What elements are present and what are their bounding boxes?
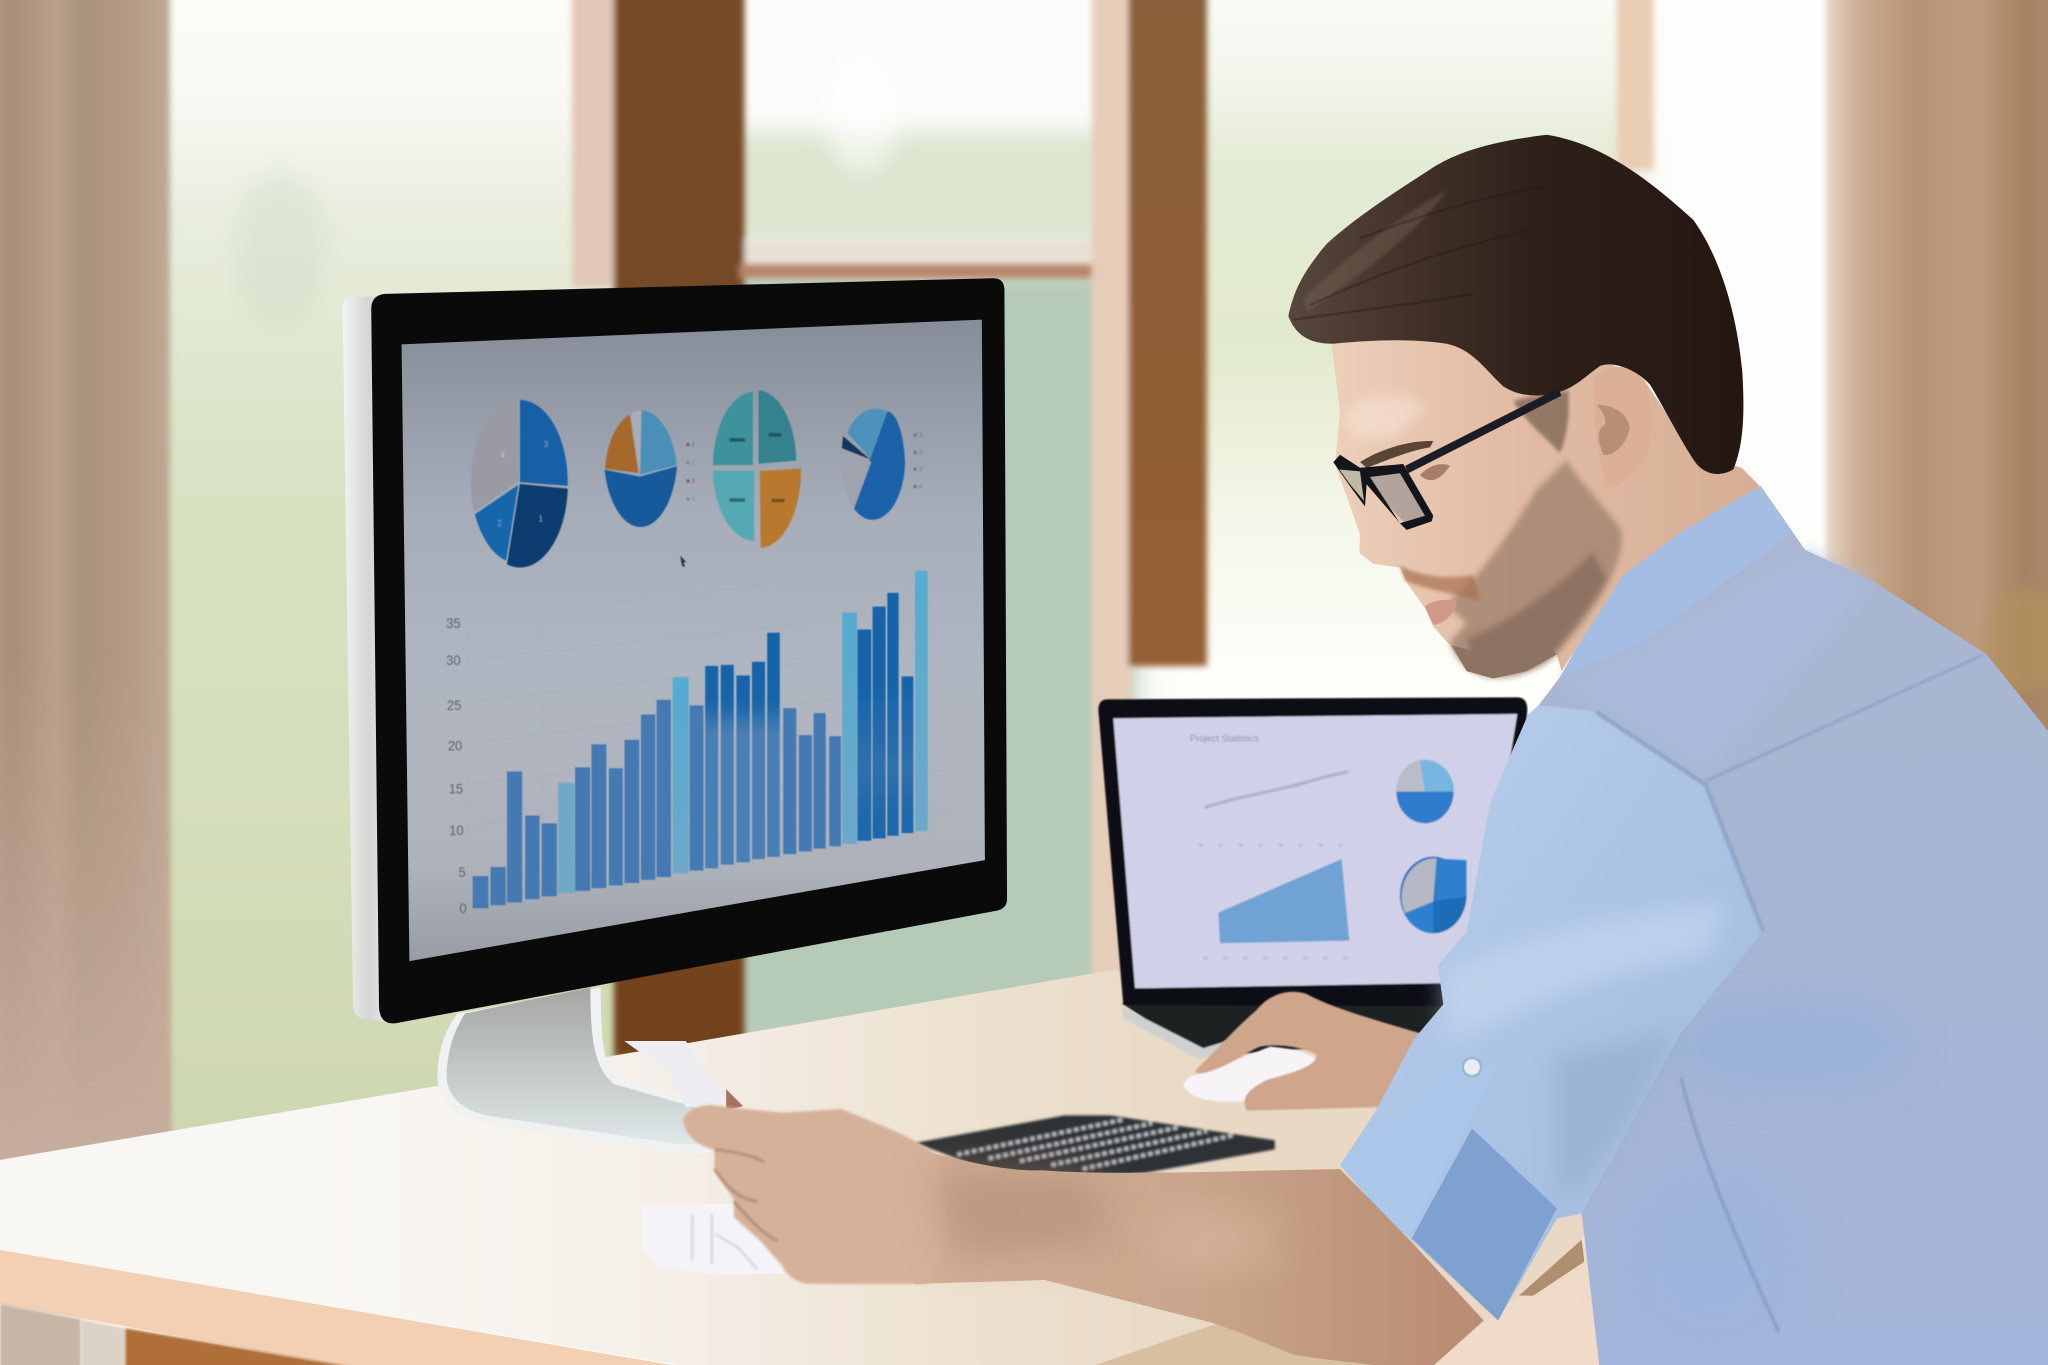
pie chart 2	[605, 411, 677, 527]
screen	[402, 320, 985, 961]
pie 4 legend: ■ 1	[913, 432, 923, 439]
pie 4 legend	[913, 432, 923, 491]
lower back blue area	[1620, 1162, 1802, 1345]
laptop base	[1122, 997, 1457, 1057]
pie chart 1: 4	[500, 450, 505, 459]
underarm blue fold	[1672, 1003, 1907, 1087]
arm hair shading	[930, 1166, 1110, 1260]
keyboard body	[916, 1115, 1275, 1182]
desk front edge	[0, 1250, 686, 1365]
laptop silver edge	[1122, 1007, 1230, 1058]
screen content	[446, 390, 947, 916]
hair highlight	[1303, 190, 1447, 312]
shirt body	[1539, 486, 2048, 1365]
paper chart marks	[692, 1215, 758, 1270]
paper held up	[624, 1041, 727, 1108]
sleeve button	[1463, 1058, 1481, 1076]
glasses temple	[1407, 392, 1560, 470]
pie 2 legend	[686, 441, 695, 503]
right curtain	[1826, 0, 2048, 758]
far right window pane	[1648, 0, 1838, 758]
armhole seam	[1596, 712, 1763, 931]
laptop line chart axis ticks	[1198, 840, 1350, 850]
darker jaw beard	[1467, 553, 1607, 673]
mouse	[1183, 1047, 1320, 1102]
laptop pie bottom	[1400, 857, 1467, 933]
pie 4 legend: ■ 2	[913, 449, 923, 457]
y axis labels: 35	[446, 616, 461, 631]
desktop monitor	[343, 278, 1007, 1023]
left curtain lower tint	[0, 653, 170, 1175]
paper on desk	[643, 1204, 785, 1275]
y axis labels: 5	[459, 865, 466, 880]
desk	[0, 970, 1607, 1365]
keyboard	[916, 1115, 1275, 1182]
ear	[1593, 367, 1651, 488]
glasses	[1333, 392, 1560, 530]
monitor stand	[438, 987, 719, 1155]
wooden window frames	[572, 0, 1654, 1058]
pie chart 4	[841, 409, 905, 520]
yoke seam	[1706, 654, 1984, 781]
cuff strap	[1340, 1061, 1495, 1238]
chart gridlines	[468, 564, 947, 908]
left pane foliage	[235, 170, 327, 327]
desk rear rail	[1519, 1239, 1584, 1296]
left window pane	[131, 0, 653, 1202]
bar chart	[473, 571, 928, 908]
under desk: table leg	[0, 1303, 81, 1365]
pie 4 legend: ■ 3	[913, 466, 923, 473]
laptop title: Project Statistics	[1190, 734, 1259, 744]
yoke	[1559, 550, 1873, 778]
sleeve shadow	[1554, 1032, 1678, 1208]
pie chart 1: 2	[497, 519, 502, 528]
key rows	[957, 1119, 1234, 1169]
right window pane	[1175, 0, 1646, 993]
y axis labels: 0	[459, 901, 467, 916]
man shirt	[1340, 486, 2048, 1365]
middle window pane	[705, 0, 1136, 1051]
lips	[1425, 600, 1457, 625]
laptop pie top	[1396, 760, 1454, 823]
window light glare	[825, 51, 899, 171]
pie 2 legend: ■ 2	[686, 460, 695, 467]
under desk: pale curtain	[81, 1319, 125, 1365]
pie 4 legend: ■ 4	[913, 483, 923, 491]
laptop area chart	[1218, 859, 1349, 943]
sleeve fold highlight	[1443, 901, 1724, 1045]
pie chart 3	[713, 390, 801, 548]
hand on mouse	[1195, 992, 1420, 1111]
glasses lens	[1360, 470, 1428, 525]
moustache	[1400, 566, 1480, 601]
glasses far lens	[1339, 470, 1364, 501]
body side seam	[1681, 1078, 1779, 1332]
desk side shadow	[1088, 1324, 1424, 1365]
back hand and mouse	[1183, 992, 1420, 1111]
pie 2 legend: ■ 3	[686, 478, 695, 485]
forearm	[914, 1149, 1484, 1365]
arm highlight	[1149, 1215, 1280, 1267]
desk top	[0, 970, 1587, 1365]
floor under desk right	[1306, 1234, 1607, 1365]
front arm and hand	[683, 1089, 1484, 1365]
eyebrow	[1360, 441, 1433, 468]
beard stubble	[1447, 460, 1622, 678]
pie 2 legend: ■ 4	[686, 496, 695, 503]
right curtain yellow patch	[1988, 588, 2048, 692]
pie 2 legend: ■ 1	[686, 441, 695, 448]
black bezel	[371, 278, 1007, 1023]
hand	[683, 1105, 947, 1284]
sleeve	[1340, 705, 1763, 1320]
pie chart 1: 3	[544, 440, 549, 449]
mouse cursor	[680, 556, 686, 567]
finger creases	[714, 1149, 777, 1241]
chin edge beard	[1452, 645, 1557, 679]
y axis labels: 10	[449, 822, 464, 838]
finger behind paper	[726, 1089, 743, 1110]
hair	[1288, 135, 1743, 474]
y axis labels: 20	[448, 738, 462, 753]
y axis labels: 15	[449, 781, 463, 797]
laptop area chart axis ticks	[1203, 953, 1360, 963]
laptop screen	[1113, 714, 1517, 988]
stand rim	[438, 987, 719, 1155]
y axis labels: 30	[446, 653, 461, 668]
pie chart 1	[471, 400, 568, 568]
neck and face skin	[1332, 327, 1760, 679]
pie chart 1: 1	[539, 514, 543, 524]
y axis labels	[446, 616, 467, 916]
silver monitor casing	[343, 296, 394, 1023]
rolled cuff	[1412, 1128, 1557, 1320]
shirt collar	[1559, 486, 1793, 678]
forehead highlight	[1343, 395, 1427, 438]
papers in hand	[624, 1041, 785, 1275]
under desk: brown floor	[125, 1328, 355, 1365]
glasses frame	[1333, 455, 1433, 530]
laptop lid	[1098, 697, 1527, 1007]
eye	[1420, 464, 1450, 480]
y axis labels: 25	[447, 698, 461, 713]
man head	[1288, 135, 1760, 679]
left curtain	[0, 0, 170, 1175]
laptop	[1098, 697, 1527, 1058]
laptop line chart	[1205, 772, 1348, 807]
stand face	[447, 987, 712, 1144]
sideburn	[1513, 390, 1569, 453]
hair strands	[1293, 187, 1543, 320]
